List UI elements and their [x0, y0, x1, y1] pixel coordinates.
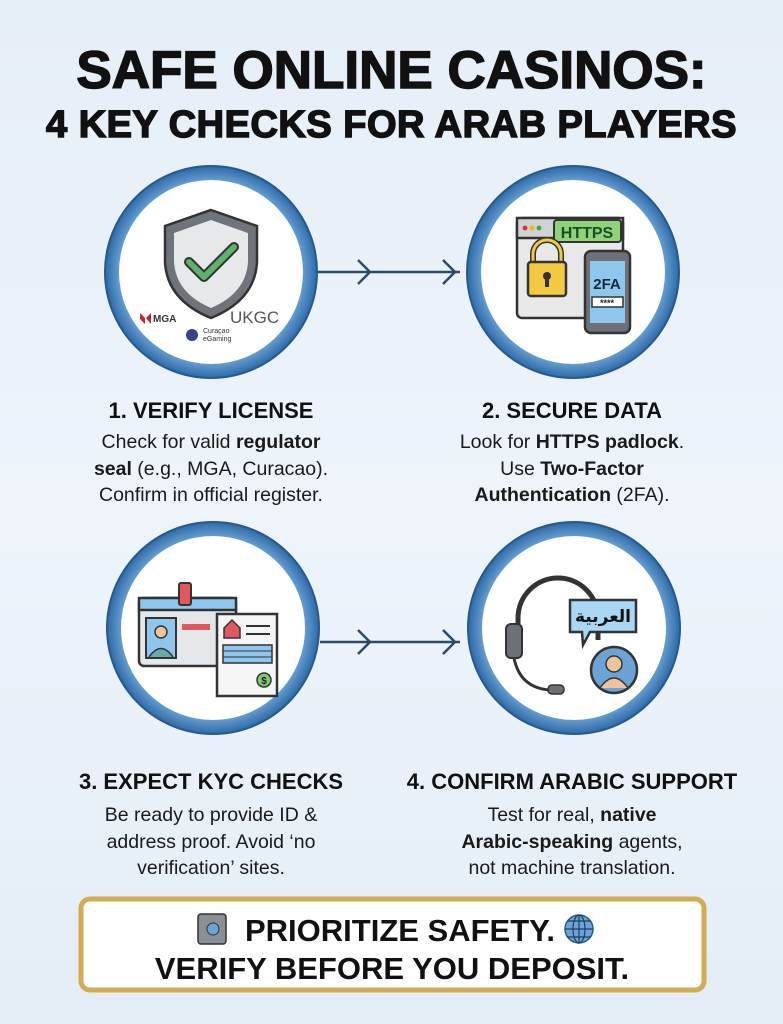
text 2: Authentication (2FA). — [474, 484, 670, 506]
circle 2: secure data — [467, 166, 679, 378]
heading 4: 4. CONFIRM ARABIC SUPPORT — [407, 769, 737, 794]
heading 3: 3. EXPECT KYC CHECKS — [79, 769, 343, 794]
circle 1: license shield: Curaçao — [203, 328, 230, 335]
text 3: Be ready to provide ID & — [105, 804, 317, 826]
circle 2: secure data: **** — [600, 298, 614, 308]
circle 1: license shield — [105, 166, 317, 378]
text 2 — [460, 431, 684, 506]
text 3: address proof. Avoid ‘no — [107, 830, 315, 852]
circle 1: license shield: eGaming — [203, 336, 232, 343]
circle 1: license shield: UKGC — [230, 308, 279, 327]
text 4 — [461, 804, 683, 879]
footer banner — [81, 899, 704, 990]
circle 4: Arabic support: العربية — [575, 602, 631, 627]
footer banner: PRIORITIZE SAFETY. — [245, 913, 555, 948]
text 4: Test for real, native — [487, 804, 657, 826]
arrow 2 — [320, 630, 460, 654]
subtitle: 4 KEY CHECKS FOR ARAB PLAYERS — [46, 104, 737, 146]
heading 2: 2. SECURE DATA — [482, 398, 662, 423]
text 4: Arabic-speaking agents, — [461, 830, 683, 852]
text 1: Check for valid regulator — [102, 431, 320, 453]
text 1: seal (e.g., MGA, Curacao). — [94, 458, 328, 480]
heading 1: 1. VERIFY LICENSE — [108, 398, 313, 423]
text 2: Use Two-Factor — [500, 458, 644, 480]
text 2: Look for HTTPS padlock. — [460, 431, 684, 453]
text 1: Confirm in official register. — [99, 484, 323, 506]
circle 2: secure data: HTTPS — [561, 225, 614, 242]
text 3 — [105, 804, 317, 879]
circle 3: KYC: $ — [261, 676, 267, 687]
circle 2: secure data: 2FA — [593, 276, 621, 293]
title: SAFE ONLINE CASINOS: — [76, 41, 707, 100]
arrow 1 — [318, 260, 460, 284]
text 4: not machine translation. — [468, 857, 676, 879]
circle 4: Arabic support — [468, 522, 680, 734]
circle 3: KYC — [107, 522, 319, 734]
text 3: verification’ sites. — [137, 857, 285, 879]
footer banner: VERIFY BEFORE YOU DEPOSIT. — [155, 951, 629, 986]
text 1 — [94, 431, 328, 506]
circle 1: license shield: MGA — [153, 314, 176, 325]
